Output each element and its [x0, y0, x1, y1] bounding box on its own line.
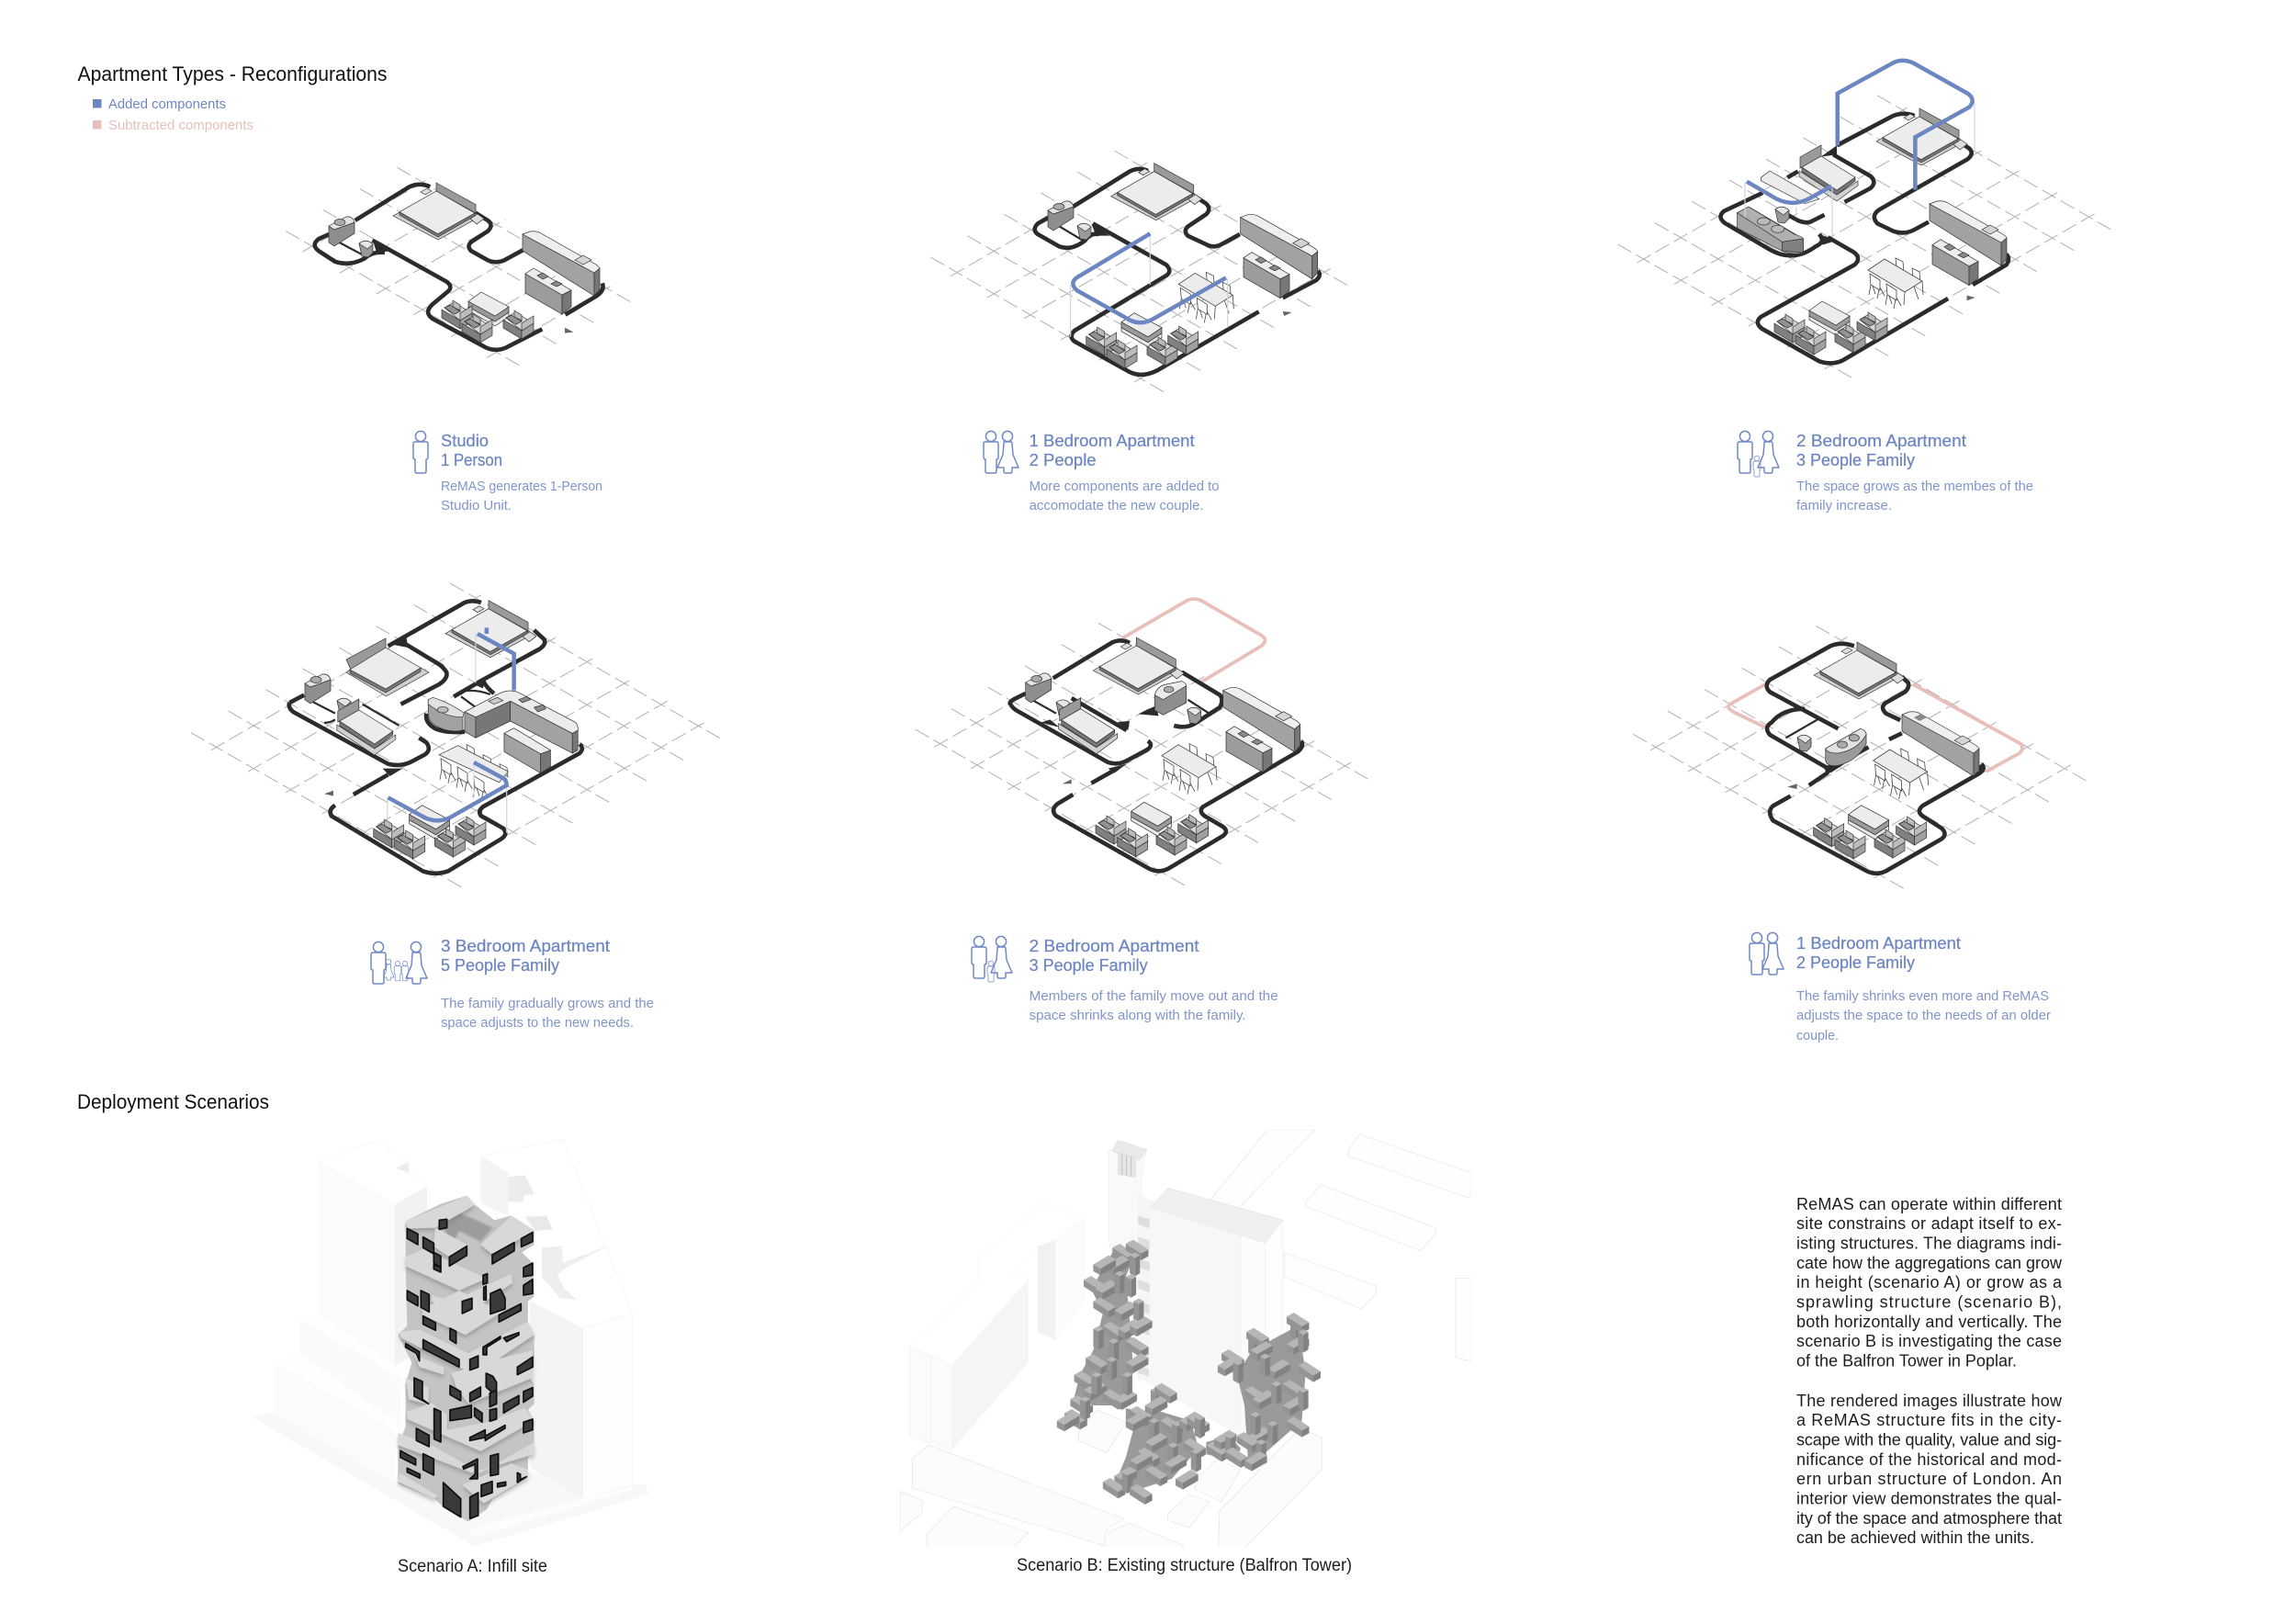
body text paragraph 2: ern urban structure of London. An	[1796, 1470, 2062, 1488]
Balfron slab	[1151, 1188, 1283, 1243]
body text paragraph 1: isting structures. The diagrams indi-	[1796, 1235, 2062, 1253]
scenario A render	[253, 1139, 649, 1546]
body text paragraph 2: a ReMAS structure fits in the city-	[1796, 1411, 2062, 1429]
plan 5 caption: 2 Bedroom Apartment	[1030, 936, 1199, 955]
plan 2 caption	[984, 431, 1220, 513]
plan 6: 1 bedroom older couple	[1633, 626, 2088, 889]
plan 2 caption: More components are added to	[1030, 479, 1220, 494]
body text paragraph 2: nificance of the historical and mod-	[1796, 1450, 2062, 1469]
plan 5 caption	[972, 936, 1278, 1023]
plan 4 caption: The family gradually grows and the	[441, 996, 654, 1011]
L kitchen	[465, 712, 476, 738]
plan 4 caption	[371, 936, 654, 1031]
vanity counter	[1738, 207, 1803, 254]
body text paragraph 1: sprawling structure (scenario B),	[1796, 1293, 2062, 1312]
body text paragraph 2: interior view demonstrates the qual-	[1796, 1490, 2062, 1508]
plan 4 caption: space adjusts to the new needs.	[441, 1015, 634, 1031]
plan 5 caption: Members of the family move out and the	[1030, 988, 1278, 1004]
plan 1 caption: 1 Person	[441, 450, 502, 469]
plan 3 caption: 2 Bedroom Apartment	[1796, 431, 1966, 450]
plan 3 caption: The space grows as the membes of the	[1796, 479, 2033, 494]
plan 1 caption: Studio	[441, 431, 489, 450]
body text paragraph 1: ReMAS can operate within different	[1796, 1195, 2062, 1213]
plan 3 caption: family increase.	[1796, 498, 1892, 513]
plan 6 caption: 1 Bedroom Apartment	[1796, 933, 1961, 953]
scenario B render	[900, 1130, 1471, 1546]
plan 2 caption: 2 People	[1030, 450, 1097, 469]
body text paragraph 1: of the Balfron Tower in Poplar.	[1796, 1352, 2017, 1370]
vanity counter	[1826, 728, 1866, 766]
legend: Subtracted components	[108, 118, 253, 133]
body text paragraph 1	[1796, 1195, 2063, 1370]
desk	[1761, 171, 1819, 204]
title: apartment types: Apartment Types - Reconfigurations	[77, 62, 388, 85]
plan 1 caption: ReMAS generates 1-Person	[441, 479, 602, 494]
body text paragraph 2: ity of the space and atmosphere that	[1796, 1509, 2062, 1528]
body text paragraph 1: in height (scenario A) or grow as a	[1796, 1273, 2063, 1291]
body text paragraph 2: can be achieved within the units.	[1796, 1528, 2034, 1547]
left building	[909, 1203, 1084, 1347]
plan 4 caption: 5 People Family	[441, 955, 560, 975]
plan 6 caption: couple.	[1796, 1028, 1839, 1043]
plan 5 caption: space shrinks along with the family.	[1030, 1008, 1246, 1023]
left stepped volumes	[275, 1362, 395, 1483]
bed 2	[346, 638, 429, 696]
legend	[93, 96, 253, 133]
aggregation structure	[1057, 1240, 1321, 1505]
right building	[480, 1139, 632, 1329]
body text paragraph 1: site constrains or adapt itself to ex-	[1796, 1214, 2062, 1233]
counter block	[1154, 686, 1187, 715]
scenario B caption: Scenario B: Existing structure (Balfron Tower)	[1017, 1556, 1352, 1575]
body text paragraph 2: The rendered images illustrate how	[1796, 1392, 2063, 1410]
body text paragraph 1: both horizontally and vertically. The	[1796, 1313, 2062, 1331]
plan 1: studio	[286, 167, 634, 367]
plan 5: 2 bedroom shrinking	[916, 599, 1370, 886]
plan 4 caption: 3 Bedroom Apartment	[441, 936, 610, 955]
added components	[1071, 233, 1228, 337]
windows	[400, 1219, 533, 1518]
plan 3 caption	[1738, 431, 2033, 513]
body text paragraph 1: scenario B is investigating the case	[1796, 1332, 2062, 1350]
legend: Added components	[108, 96, 226, 112]
hob	[1914, 714, 1927, 721]
heading: deployment scenarios: Deployment Scenarios	[77, 1090, 269, 1113]
plan 6 caption: adjusts the space to the needs of an older	[1796, 1008, 2051, 1023]
body text paragraph 2	[1796, 1392, 2063, 1547]
plan 3: 2 bedroom	[1618, 61, 2115, 380]
plan 1 caption: Studio Unit.	[441, 498, 512, 513]
plan 2 caption: accomodate the new couple.	[1030, 498, 1204, 513]
body text paragraph 2: scape with the quality, value and sig-	[1796, 1431, 2062, 1449]
plan 5 caption: 3 People Family	[1030, 955, 1148, 975]
Balfron service tower	[1109, 1141, 1147, 1382]
plan 6 caption: The family shrinks even more and ReMAS	[1796, 988, 2049, 1004]
body text paragraph 1: cate how the aggregations can grow	[1796, 1254, 2063, 1272]
plan 6 caption: 2 People Family	[1796, 953, 1916, 972]
plan 3 caption: 3 People Family	[1796, 450, 1916, 469]
plan 4: 3 bedroom	[191, 583, 723, 888]
balconies	[1137, 1196, 1155, 1382]
plan 2: 1 bedroom	[930, 151, 1350, 393]
aggregation tower	[398, 1196, 535, 1522]
low blocks	[900, 1410, 1322, 1546]
added components	[388, 627, 514, 833]
curved counter	[428, 700, 463, 731]
plan 6 caption	[1750, 932, 2051, 1043]
plan 2 caption: 1 Bedroom Apartment	[1030, 431, 1195, 450]
added components	[1745, 61, 1975, 236]
plan 1 caption	[413, 431, 602, 513]
scenario A caption: Scenario A: Infill site	[398, 1557, 547, 1576]
island	[504, 733, 541, 773]
